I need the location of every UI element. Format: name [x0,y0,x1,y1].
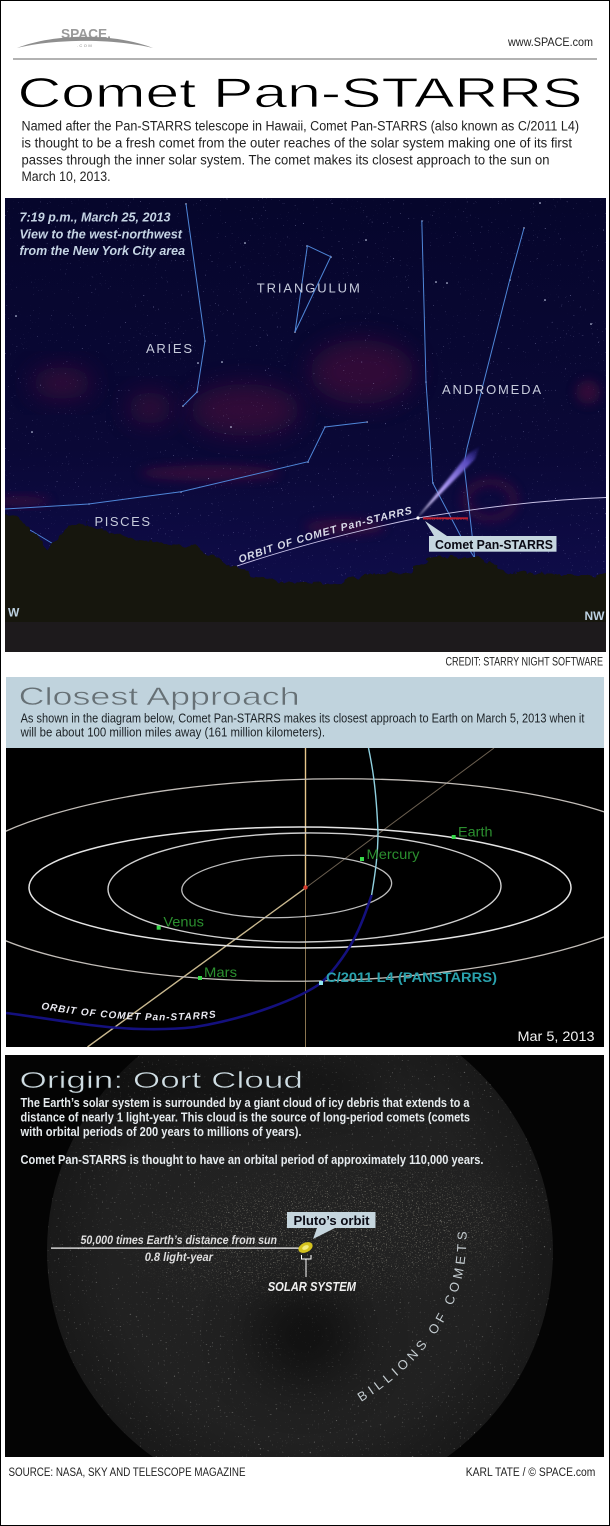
panel: Oort cloud [5,1055,604,1457]
comet [416,446,480,521]
compass labels [8,608,604,620]
description: distance of nearly 1 light-year. This cloud is the source of long-period comets (comets [20,1111,470,1125]
header [13,26,597,60]
heading: Closest Approach [19,683,300,711]
reference axes [88,748,494,1047]
curved label: billions of comets: BILLIONS OF COMETS [357,1232,467,1402]
constellation labels: TRIANGULUM [257,281,360,296]
distance line: 50,000 times Earth’s distance from sun [80,1233,277,1247]
comet marker and label: C/2011 L4 (PANSTARRS) [326,970,497,985]
cloud sphere [47,1055,553,1457]
solar system marker [268,1240,357,1294]
orbit label: ORBIT OF COMET Pan-STARRS [239,506,412,562]
constellation labels: ARIES [146,341,192,356]
comet: C/2011 L4 (PANSTARRS) [423,516,469,521]
foreground trees [5,514,606,622]
callout: Comet Pan-STARRS: Comet Pan-STARRS [435,537,553,552]
date label: Mar 5, 2013 [518,1028,595,1044]
title: Comet Pan-STARRS [18,69,582,116]
constellation labels: PISCES [94,514,150,529]
intro text: is thought to be a fresh comet from the outer reaches of the solar system making one of its first [22,136,572,151]
intro text: Named after the Pan-STARRS telescope in Hawaii, Comet Pan-STARRS (also known as C/2011 L4) [22,119,579,134]
panel: closest approach header [6,677,604,748]
description: with orbital periods of 200 years to millions of years). [20,1125,302,1139]
planet labels: Earth [458,824,492,840]
planet labels: Venus [163,914,204,930]
orbit label: ORBIT OF COMET Pan-STARRS [42,1002,216,1020]
sun [303,885,308,890]
planet labels: Mercury [366,846,420,862]
solar system marker: SOLAR SYSTEM [268,1280,357,1294]
logo: SPACE.com: SPACE. [61,26,111,42]
observation time note: View to the west-northwest [20,226,183,241]
ground [5,622,606,652]
description [20,711,585,740]
intro text: passes through the inner solar system. The comet makes its closest approach to the sun on [22,152,550,167]
planet orbits [0,771,610,989]
website url: www.SPACE.com [507,37,593,49]
constellation lines [5,204,524,558]
compass labels: NW [584,609,605,623]
intro text [22,119,579,184]
description [20,1096,484,1167]
panel: sky chart [5,198,606,652]
section heading: Origin: Oort Cloud [20,1067,303,1093]
planet labels: Mars [204,964,237,980]
description: will be about 100 million miles away (161 million kilometers). [20,725,325,740]
observation time note: 7:19 p.m., March 25, 2013 [20,210,171,225]
callout: Pluto's orbit: Pluto’s orbit [294,1213,370,1228]
footer: byline: KARL TATE / © SPACE.com [466,1467,595,1479]
comet orbit [6,748,378,1029]
planets [157,835,456,980]
logo: SPACE.com [17,26,153,48]
planet labels [163,824,492,980]
description: The Earth’s solar system is surrounded by a giant cloud of icy debris that extends to a [20,1096,470,1110]
constellation labels: ANDROMEDA [442,382,541,397]
comet orbit line [237,498,606,566]
distance line: 0.8 light-year [145,1250,214,1264]
star field [5,198,606,584]
callout: Comet Pan-STARRS [425,521,556,552]
logo: SPACE.com: .COM [77,43,93,48]
description: Comet Pan-STARRS is thought to have an orbital period of approximately 110,000 years. [20,1153,484,1167]
footer: source: SOURCE: NASA, SKY AND TELESCOPE MAGAZINE [8,1467,246,1479]
red nebula glow [0,340,600,535]
intro text: March 10, 2013. [22,169,110,184]
callout: Pluto's orbit [287,1212,376,1239]
distance line [51,1235,299,1264]
observation time note [20,210,185,258]
panel: orbit diagram [6,748,604,1047]
compass labels: W [8,606,20,620]
observation time note: from the New York City area [20,243,185,258]
constellation labels [94,281,541,529]
